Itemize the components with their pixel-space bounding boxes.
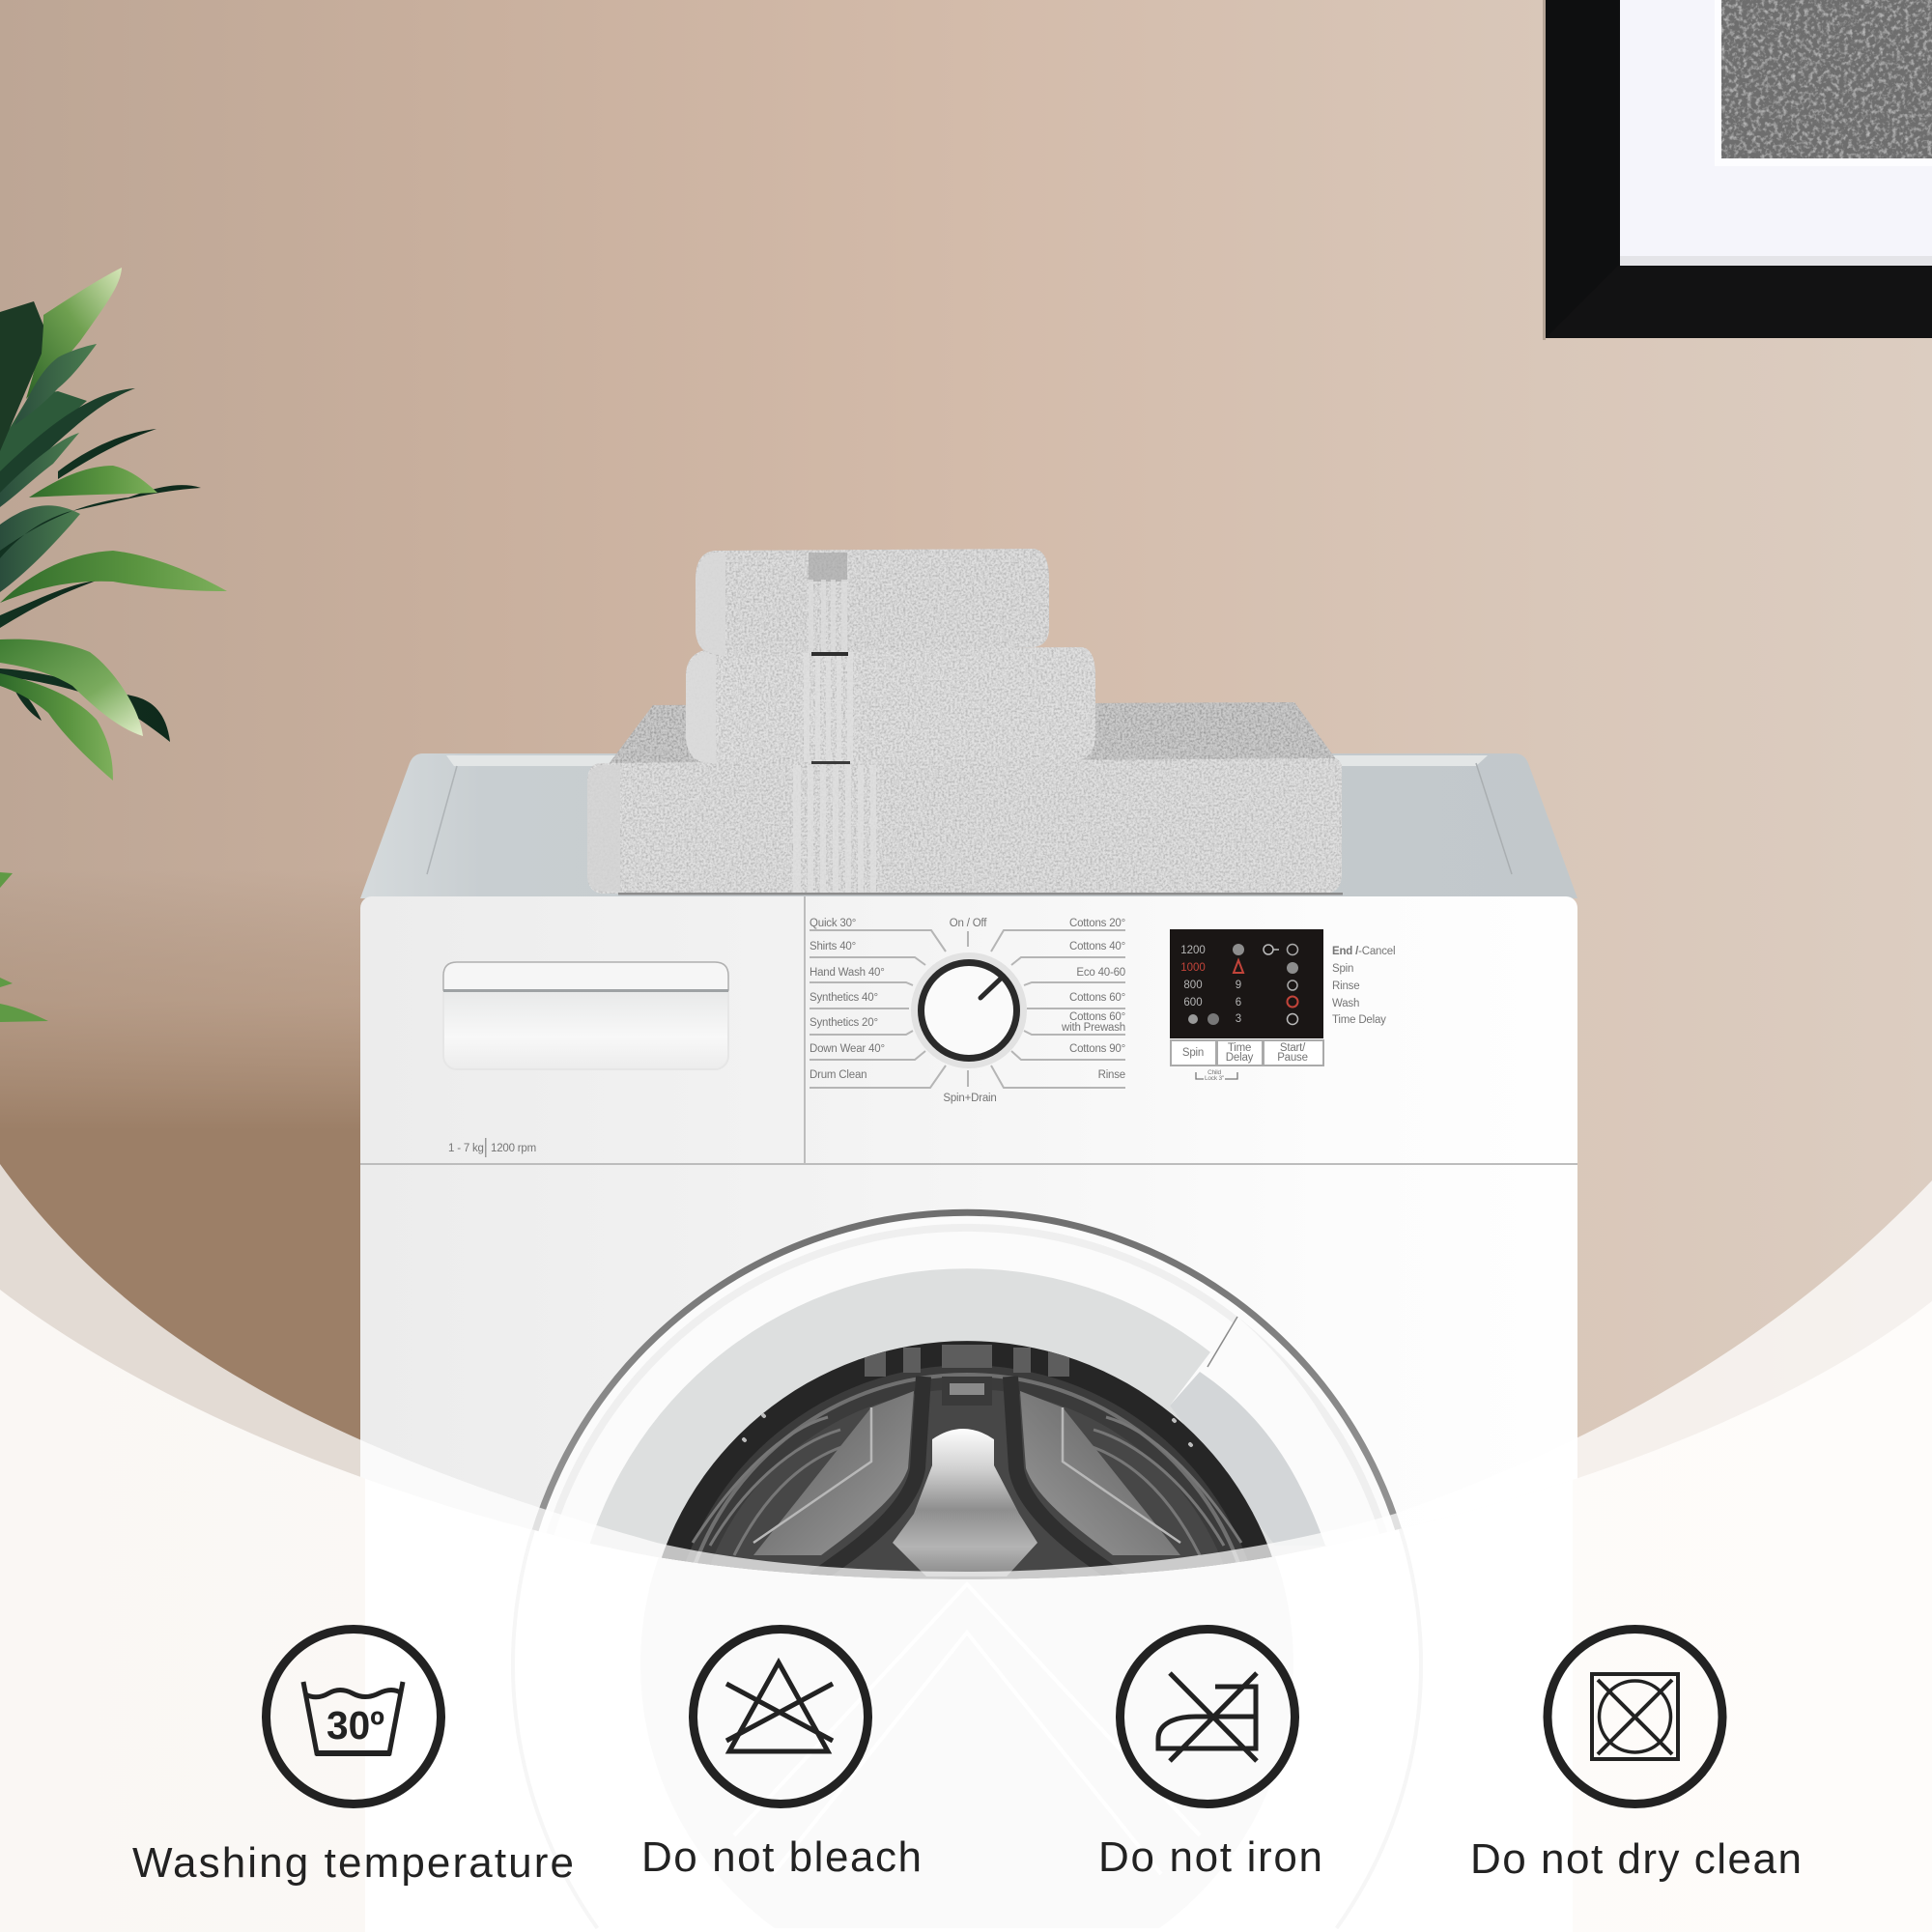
plant leaves <box>0 268 227 1022</box>
care item: do not bleach <box>641 1629 922 1881</box>
label: Do not bleach <box>641 1833 922 1881</box>
display buttons <box>1171 1040 1323 1082</box>
display buttons: Lock 3" <box>1205 1075 1225 1082</box>
drum interior <box>662 1341 1272 1579</box>
medium towel <box>686 647 1095 764</box>
care item: do not iron <box>1098 1629 1322 1881</box>
small towel <box>696 549 1049 656</box>
programme labels right: Cottons 60° <box>1069 1011 1125 1023</box>
programme labels left: Drum Clean <box>810 1069 867 1081</box>
display legend: End /-Cancel <box>1332 946 1395 957</box>
icon: washing tub 30 degrees <box>267 1629 440 1804</box>
label: Do not dry clean <box>1470 1835 1802 1883</box>
icon: washing tub 30 degrees: 30º <box>327 1703 384 1747</box>
display legend: Rinse <box>1332 980 1359 992</box>
drum baffle streaks <box>693 1417 1241 1555</box>
towels stack <box>587 549 1343 895</box>
programme labels left: Synthetics 40° <box>810 992 878 1004</box>
programme labels left: Shirts 40° <box>810 941 856 952</box>
programme labels left: Down Wear 40° <box>810 1043 885 1055</box>
digital display: 1000 <box>1180 962 1206 974</box>
display legend: Spin <box>1332 963 1353 975</box>
on off and spin labels: On / Off <box>950 918 987 929</box>
digital display: 800 <box>1183 980 1203 991</box>
programme dial <box>911 952 1027 1068</box>
washer door <box>519 1212 1415 1608</box>
programme labels right: Cottons 20° <box>1069 918 1125 929</box>
display buttons: Start/ <box>1280 1042 1306 1054</box>
care item: washing temperature <box>132 1629 574 1887</box>
digital display: 9 <box>1236 980 1241 991</box>
framed picture <box>1543 0 1932 340</box>
care item: do not dry clean <box>1470 1629 1802 1883</box>
programme labels left: Hand Wash 40° <box>810 967 885 979</box>
detergent drawer <box>443 962 728 1069</box>
on off and spin labels: Spin+Drain <box>943 1093 997 1104</box>
bottom white panel <box>0 1290 1932 1932</box>
digital display: 1200 <box>1180 945 1206 956</box>
programme labels left <box>810 918 946 1088</box>
icon: crossed iron <box>1121 1629 1294 1804</box>
display legend: Time Delay <box>1332 1014 1386 1026</box>
large bath towel <box>587 702 1343 895</box>
faint washer door ghost <box>511 1528 1423 1929</box>
on off and spin labels <box>943 918 997 1104</box>
display buttons: Spin <box>1182 1047 1204 1059</box>
digital display: 6 <box>1236 997 1241 1009</box>
programme labels right <box>991 918 1125 1088</box>
icon: crossed tumble square <box>1548 1629 1722 1804</box>
display legend: Wash <box>1332 998 1359 1009</box>
machine front body <box>360 896 1577 1932</box>
display buttons: Pause <box>1277 1052 1308 1064</box>
programme labels right: Cottons 90° <box>1069 1043 1125 1055</box>
digital display <box>1170 929 1323 1038</box>
display legend <box>1332 946 1395 1026</box>
digital display: 600 <box>1183 997 1203 1009</box>
door latch wedge <box>1170 1317 1375 1546</box>
programme labels right: Cottons 60° <box>1069 992 1125 1004</box>
programme labels left: Quick 30° <box>810 918 856 929</box>
capacity label <box>448 1138 536 1157</box>
programme labels left: Synthetics 20° <box>810 1017 878 1029</box>
programme labels right: with Prewash <box>1061 1022 1125 1034</box>
display buttons: Delay <box>1226 1052 1254 1064</box>
programme labels right: Rinse <box>1098 1069 1125 1081</box>
control panel dividers <box>360 896 1577 1165</box>
capacity label: 1 - 7 kg <box>448 1143 484 1154</box>
icon: crossed triangle <box>694 1629 867 1804</box>
drum perforations <box>742 1413 1194 1447</box>
label: Do not iron <box>1098 1833 1322 1881</box>
washing machine <box>360 753 1577 1579</box>
display buttons: Child <box>1208 1069 1221 1076</box>
digital display: 3 <box>1236 1013 1241 1025</box>
translucent arc band <box>0 1164 1932 1932</box>
capacity label: 1200 rpm <box>491 1143 536 1154</box>
programme labels right: Eco 40-60 <box>1076 967 1125 979</box>
machine top surface <box>360 753 1577 898</box>
display buttons: Time <box>1228 1042 1251 1054</box>
programme labels right: Cottons 40° <box>1069 941 1125 952</box>
label: Washing temperature <box>132 1839 574 1887</box>
